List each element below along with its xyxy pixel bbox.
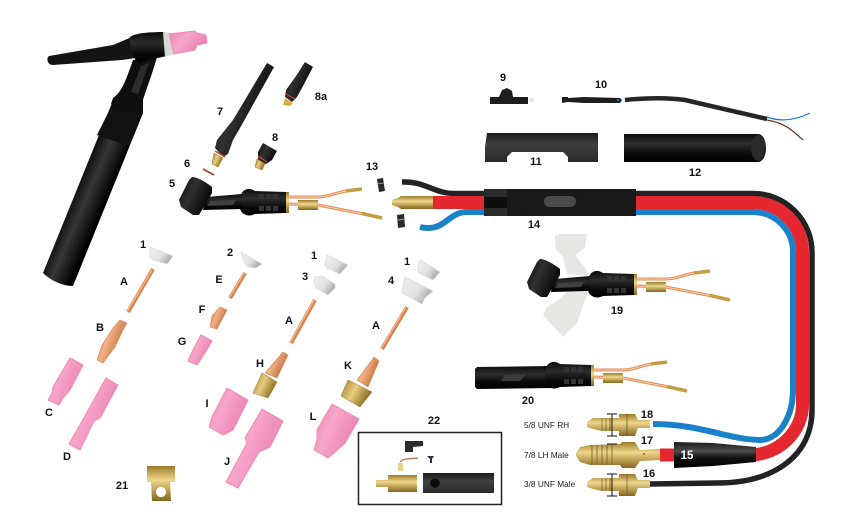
collet A (381, 307, 407, 349)
cup I (209, 388, 248, 435)
label 19: 19 (611, 305, 623, 317)
column 4 labels: A (372, 320, 380, 332)
column 1 labels: B (96, 322, 104, 334)
part 15: cable cover (674, 442, 756, 468)
ghost head down position (543, 292, 588, 337)
column 1 labels: D (63, 451, 71, 463)
label 14: 14 (528, 219, 541, 231)
part 20: handle adapter with leads (475, 362, 687, 407)
consumables column 4 (310, 256, 440, 458)
column 1 labels (45, 239, 146, 463)
label 20: 20 (522, 395, 534, 407)
label 8a: 8a (315, 91, 328, 103)
red gas cable (432, 202, 802, 455)
gasket 1 (325, 255, 348, 274)
column 2 labels: F (199, 304, 206, 316)
part 9: switch (490, 72, 534, 104)
thread size labels (524, 420, 576, 489)
blue water cable (420, 212, 793, 440)
pink gas cup (169, 31, 207, 54)
part 22: boxed adapter kit (358, 415, 502, 504)
cup G (188, 335, 212, 365)
collet body F (210, 307, 227, 329)
part 16: fitting 3/8 UNF Male (587, 468, 655, 496)
ghost head up position (555, 234, 588, 276)
label 13: 13 (366, 161, 378, 173)
label 9: 9 (500, 72, 506, 84)
label 5: 5 (169, 178, 175, 190)
consumables column 2 (178, 247, 262, 365)
consumables column 1 (45, 239, 173, 463)
column 2 labels (178, 247, 233, 348)
column 4 labels (310, 256, 410, 423)
part 21: brass block (116, 466, 175, 501)
part 8a: knurled back cap (283, 62, 328, 106)
label 22: 22 (428, 415, 440, 427)
part 5: torch head with leads (169, 177, 382, 218)
part 19: angled head with ghost positions (527, 234, 730, 337)
part 11: handle cover (485, 133, 598, 168)
column 1 labels: C (45, 407, 53, 419)
part 10: switch plug and cable (562, 79, 810, 140)
brass connector on red cable (392, 196, 433, 209)
part 18: fitting 5/8 UNF RH (587, 409, 653, 436)
back cap (47, 37, 135, 65)
gasket 2 (241, 252, 262, 268)
column 4 labels: 1 (404, 256, 410, 268)
part 12: sheath tube (624, 134, 766, 179)
part 7: long back cap (212, 63, 274, 167)
main assembled torch (43, 31, 207, 286)
collet E (229, 273, 245, 298)
column 4 labels: 4 (388, 275, 395, 287)
gasket 1 (417, 260, 440, 280)
ceramic collar (163, 32, 175, 57)
insulator 3 (314, 276, 335, 295)
column 3 labels (205, 250, 317, 468)
label 10: 10 (595, 79, 607, 91)
column 3 labels: A (285, 315, 293, 327)
label 6: 6 (184, 158, 190, 170)
part 14: cable handle grip (484, 189, 636, 231)
cup gasket 1 (150, 247, 173, 264)
column 2 labels: 2 (227, 247, 233, 259)
collet A (127, 269, 153, 312)
knurled handle (43, 103, 143, 286)
large cup L (314, 404, 359, 458)
torch neck (111, 57, 157, 114)
column 3 labels: H (256, 358, 264, 370)
consumables column 3 (205, 250, 348, 488)
collet body B (97, 320, 127, 363)
label 11: 11 (530, 156, 542, 168)
large gas lens K (357, 357, 379, 387)
collet A (290, 300, 315, 343)
label 18: 18 (641, 409, 653, 421)
column 4 labels: L (310, 411, 317, 423)
part 8: short back cap (255, 132, 278, 170)
label 16: 16 (643, 468, 655, 480)
column 1 labels: A (120, 276, 128, 288)
label 7: 7 (217, 106, 223, 118)
cup D (69, 378, 118, 450)
column 3 labels: 1 (311, 250, 317, 262)
column 2 labels: E (215, 274, 223, 286)
handle collar (97, 105, 142, 146)
cup C (48, 358, 83, 405)
gas lens H (265, 352, 288, 378)
column 4 labels: K (344, 360, 352, 372)
torch head (130, 32, 167, 63)
column 2 labels: G (178, 336, 186, 348)
label 15: 15 (681, 450, 694, 462)
label 8: 8 (272, 132, 278, 144)
label 21: 21 (116, 480, 128, 492)
thread size labels: 7/8 LH Male (524, 450, 569, 460)
column 3 labels: I (205, 398, 209, 410)
black power cable (402, 182, 812, 484)
thread size labels: 3/8 UNF Male (524, 479, 576, 489)
insulator 4 (402, 277, 433, 304)
part 13: clamps (366, 161, 405, 228)
label 12: 12 (689, 167, 701, 179)
label 17: 17 (641, 435, 653, 447)
column 3 labels: 3 (302, 271, 308, 283)
column 3 labels: J (224, 456, 230, 468)
part 17: fitting 7/8 LH Male (576, 435, 660, 468)
cup J (226, 409, 283, 488)
column 1 labels: 1 (140, 239, 146, 251)
thread size labels: 5/8 UNF RH (524, 420, 569, 430)
part 6: o-ring (184, 158, 214, 175)
